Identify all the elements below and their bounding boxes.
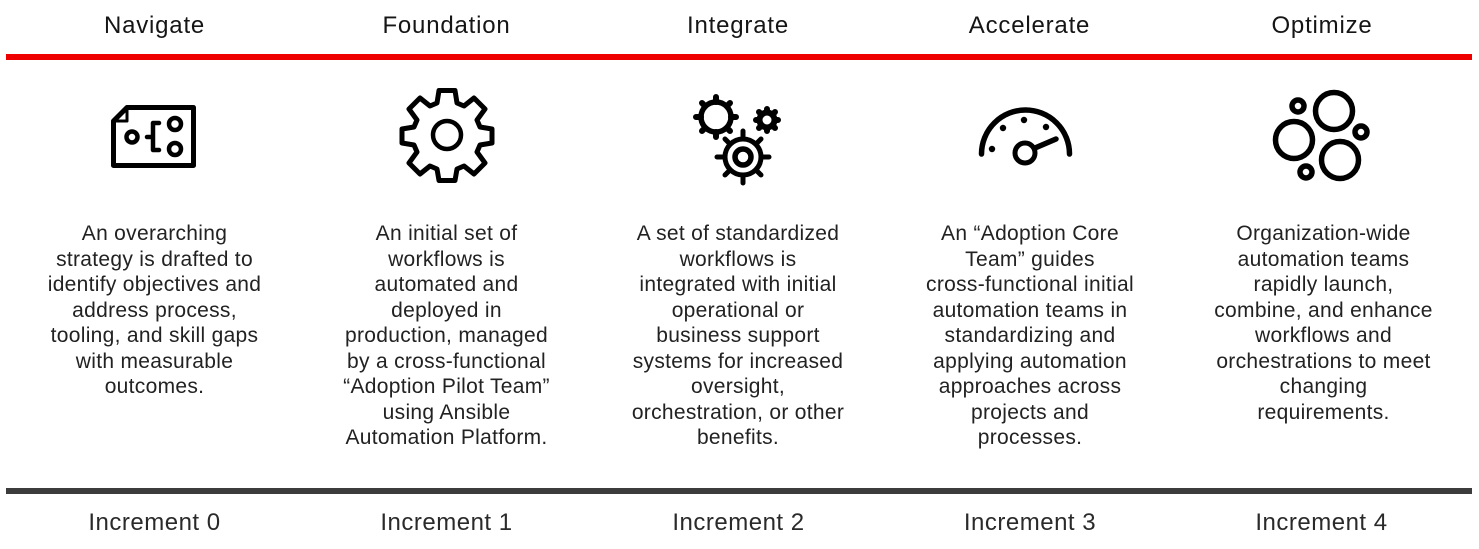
text: Optimize description: combine, and enhance — [1214, 298, 1433, 322]
heading: Navigate: Navigate — [104, 12, 205, 39]
text: Foundation description — [343, 222, 550, 449]
icon: document with flow diagram — [114, 108, 194, 166]
text: Foundation description: “Adoption Pilot Team” — [343, 375, 550, 398]
text: Accelerate description: An “Adoption Core — [941, 222, 1119, 245]
text: Integrate description — [632, 222, 844, 449]
text: Navigate description: identify objectives and — [48, 273, 261, 296]
text: Optimize description: workflows and — [1255, 324, 1392, 347]
text: Accelerate description: projects and — [971, 400, 1089, 424]
text: Foundation description: production, managed — [345, 324, 548, 347]
text: Navigate description — [48, 222, 261, 398]
text: Integrate description: orchestration, or other — [632, 400, 844, 424]
text: Foundation description: by a cross-functional — [347, 350, 546, 372]
label: Increment 2: Increment 2 — [672, 509, 805, 536]
text: Navigate description: An overarching — [82, 222, 227, 245]
text: Optimize description: changing — [1280, 375, 1367, 398]
text: Accelerate description: standardizing and — [945, 324, 1115, 347]
text: Navigate description: address process, — [72, 298, 237, 322]
text: Foundation description: workflows is — [388, 248, 505, 270]
text: Optimize description: requirements. — [1257, 400, 1390, 424]
text: Integrate description: benefits. — [697, 426, 779, 449]
text: Accelerate description: cross-functional initial — [926, 273, 1134, 296]
text: Optimize description: Organization-wide — [1236, 222, 1411, 245]
heading: Accelerate: Accelerate — [969, 12, 1090, 39]
text: Navigate description: outcomes. — [105, 375, 204, 398]
text: Foundation description: automated and — [374, 273, 518, 296]
dark bottom rule — [6, 488, 1472, 494]
text: Navigate description: strategy is drafted to — [56, 248, 253, 270]
text: Accelerate description: Team” guides — [965, 248, 1095, 270]
icon: three gears — [696, 97, 778, 183]
text: Optimize description — [1214, 222, 1433, 424]
icon: circles cluster — [1276, 92, 1367, 178]
text: Integrate description: A set of standardized — [637, 222, 839, 245]
text: Integrate description: business support — [656, 324, 820, 347]
heading: Optimize: Optimize — [1271, 12, 1373, 39]
heading: Integrate: Integrate — [687, 12, 789, 39]
text: Optimize description: orchestrations to meet — [1216, 350, 1431, 372]
text: Accelerate description: processes. — [978, 426, 1082, 449]
text: Accelerate description: applying automation — [933, 350, 1127, 372]
text: Optimize description: automation teams — [1238, 248, 1409, 270]
text: Integrate description: workflows is — [680, 248, 796, 270]
text: Navigate description: with measurable — [76, 350, 233, 372]
text: Foundation description: Automation Platform. — [345, 426, 548, 449]
text: Foundation description: using Ansible — [383, 400, 510, 424]
text: Optimize description: rapidly launch, — [1254, 273, 1393, 296]
label: Increment 4: Increment 4 — [1255, 509, 1388, 536]
heading: Foundation: Foundation — [382, 12, 511, 39]
red top rule — [6, 54, 1472, 60]
text: Integrate description: systems for increased — [633, 350, 843, 372]
text: Foundation description: An initial set of — [376, 222, 517, 245]
text: Accelerate description — [926, 222, 1134, 449]
label: Increment 1: Increment 1 — [380, 509, 513, 536]
icon: speedometer — [982, 110, 1070, 163]
label: Increment 3: Increment 3 — [964, 509, 1096, 536]
text: Integrate description: operational or — [672, 298, 804, 322]
icon: cog — [402, 90, 492, 180]
text: Accelerate description: approaches across — [939, 375, 1121, 398]
text: Integrate description: integrated with initial — [639, 273, 837, 296]
text: Navigate description: tooling, and skill gaps — [51, 324, 258, 347]
text: Integrate description: oversight, — [691, 375, 785, 398]
label: Increment 0: Increment 0 — [88, 509, 221, 536]
text: Foundation description: deployed in — [391, 298, 502, 322]
text: Accelerate description: automation teams in — [933, 298, 1127, 322]
